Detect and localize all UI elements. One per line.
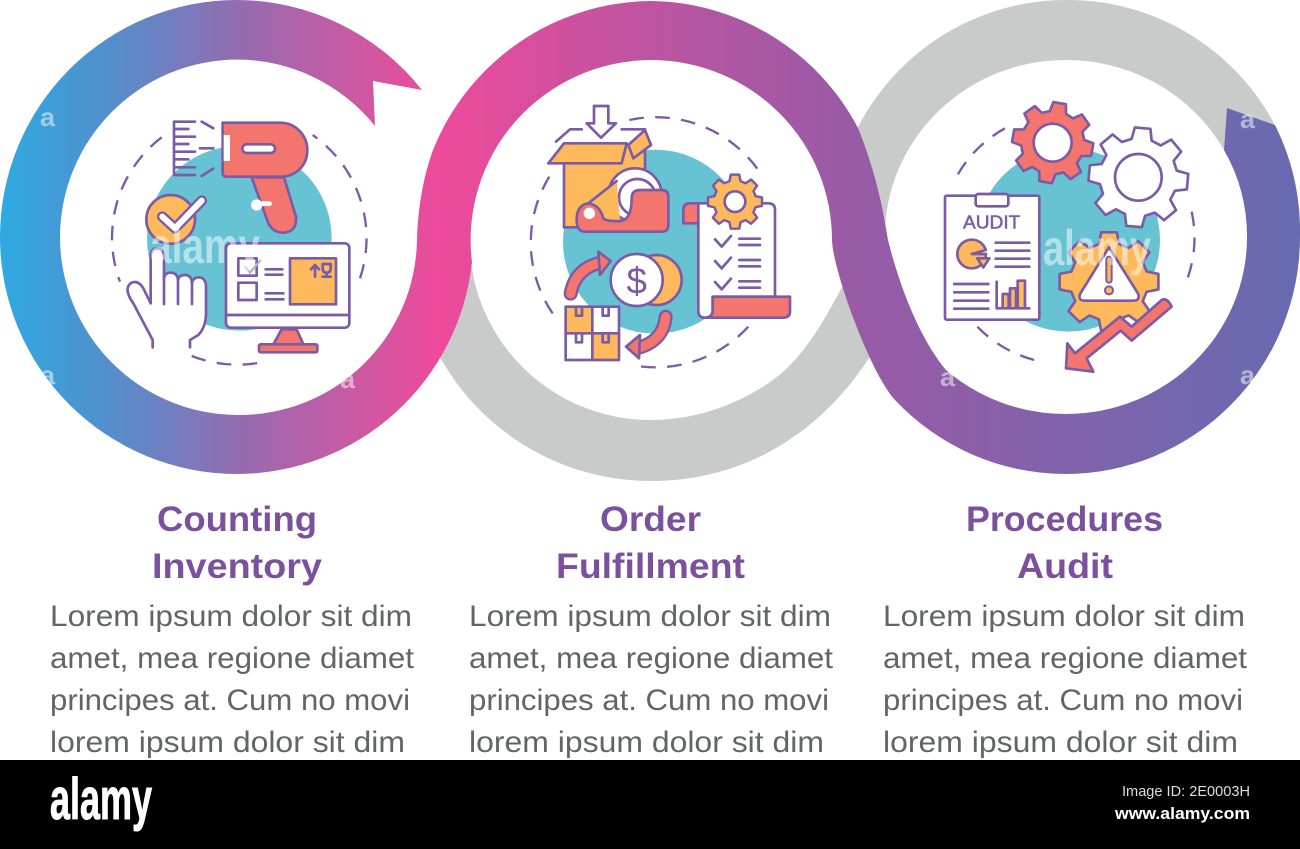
icon: white gear: [1085, 124, 1192, 231]
body: counting inventory: lorem ipsum dolor sit dim: [50, 726, 405, 759]
body: order fulfillment: amet, mea regione diamet: [469, 642, 834, 675]
icon: stacked boxes: [566, 307, 619, 360]
heading: counting inventory: Inventory: [152, 547, 323, 586]
body: procedures audit: amet, mea regione diamet: [883, 642, 1248, 675]
heading: procedures audit: Audit: [1017, 547, 1113, 586]
watermarks: a: [1240, 360, 1256, 390]
icon: procedures audit: [945, 96, 1195, 372]
gray ring segments: [427, 0, 1275, 481]
watermarks: a: [40, 360, 56, 390]
icon: warning gear: [1060, 232, 1158, 331]
body: procedures audit: principes at. Cum no movi: [883, 684, 1243, 717]
text block: counting inventory: [50, 500, 415, 759]
icon: order fulfillment: [531, 106, 790, 367]
icon: inventory counting: [112, 122, 367, 365]
heading: procedures audit: Procedures: [966, 500, 1163, 539]
icon: audit clipboard: AUDIT: [963, 211, 1020, 232]
image id: Image ID: 2E0003H: [1122, 783, 1250, 800]
icon: dollar coins: $: [626, 260, 647, 301]
icon: yellow gear: [708, 175, 762, 229]
text block: order fulfillment: [469, 500, 834, 759]
text block: procedures audit: [883, 500, 1248, 759]
website: www.alamy.com: [1114, 804, 1250, 823]
watermarks: a: [940, 362, 956, 392]
teal blob 1: [147, 146, 332, 331]
body: order fulfillment: principes at. Cum no movi: [469, 684, 829, 717]
body: counting inventory: amet, mea regione diamet: [50, 642, 415, 675]
watermarks: a: [340, 364, 356, 394]
body: counting inventory: [50, 600, 415, 759]
icon: monitor: [226, 243, 349, 352]
icon: open box: [548, 106, 651, 227]
dashed ring 1: [112, 135, 367, 365]
icon: checklist scroll: [683, 203, 790, 318]
body: order fulfillment: lorem ipsum dolor sit dim: [469, 726, 824, 759]
arrow: decline: [1066, 299, 1172, 372]
heading: order fulfillment: [556, 500, 745, 586]
arrow: boxes to coins: [571, 252, 611, 294]
body: procedures audit: Lorem ipsum dolor sit dim: [883, 600, 1245, 633]
footer band: [0, 760, 1300, 849]
body: counting inventory: principes at. Cum no movi: [50, 684, 410, 717]
body: procedures audit: lorem ipsum dolor sit dim: [883, 726, 1238, 759]
watermarks: a: [1240, 104, 1256, 134]
alamy logo: alamy: [50, 767, 152, 832]
watermarks: [40, 102, 1256, 394]
watermarks: alamy: [1043, 220, 1151, 276]
heading: procedures audit: [966, 500, 1163, 586]
heading: counting inventory: [152, 500, 323, 586]
barcode scanner: [223, 123, 307, 233]
icon: dollar coins: [611, 254, 682, 306]
gradient ribbon with arrows: [0, 0, 1300, 474]
watermarks: a: [40, 102, 56, 132]
teal blob 2: [563, 150, 747, 334]
body: order fulfillment: [469, 600, 834, 759]
body: procedures audit: [883, 600, 1248, 759]
heading: order fulfillment: Order: [600, 500, 701, 539]
arrow: coins to boxes: [626, 317, 666, 358]
ruler and scan beams: [174, 122, 213, 176]
icon: audit clipboard: [945, 194, 1039, 320]
icon: coral gear: [1006, 96, 1099, 189]
body: order fulfillment: Lorem ipsum dolor sit dim: [469, 600, 831, 633]
body: counting inventory: Lorem ipsum dolor sit dim: [50, 600, 412, 633]
icon: check badge: [146, 195, 202, 244]
icon: tape dispenser: [577, 168, 668, 232]
teal blob 3: [977, 148, 1160, 332]
icon: hand: [128, 248, 206, 347]
heading: counting inventory: Counting: [157, 500, 317, 539]
dashed ring 2: [531, 117, 762, 367]
heading: order fulfillment: Fulfillment: [556, 547, 745, 586]
dashed ring 3: [954, 128, 1195, 362]
watermarks: alamy: [150, 218, 260, 274]
